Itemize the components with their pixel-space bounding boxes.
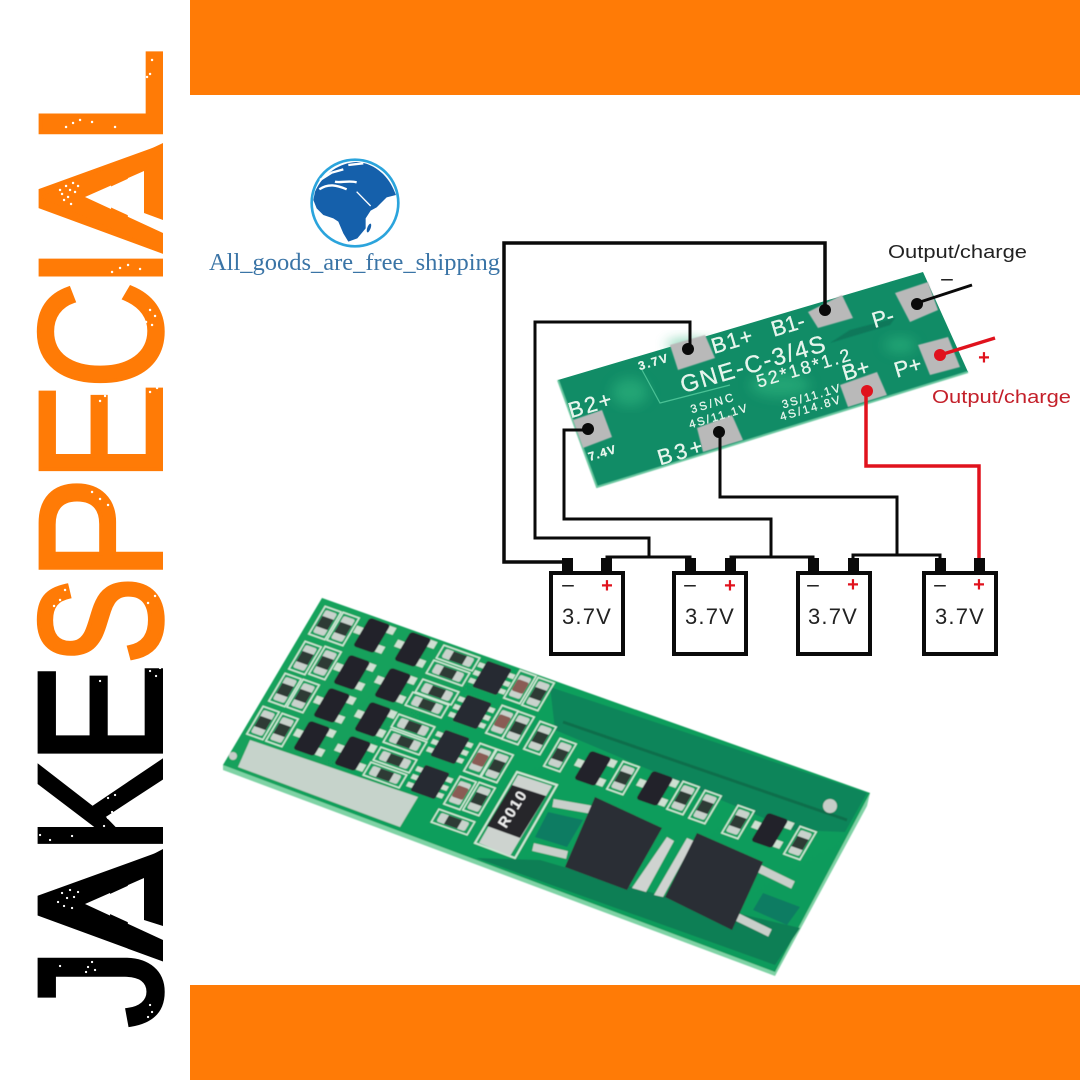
MOSFET 2 [654,833,800,933]
board silkscreen labels: 4S/11.1V [688,403,749,431]
battery 4 [924,558,996,654]
board silkscreen labels: 7.4V [586,442,617,464]
board body [558,272,968,487]
battery 1: 3.7V [562,604,612,629]
wire: B3+ to link 3-4 [720,433,897,555]
battery 4: – [934,573,946,596]
top orange band [190,0,1080,95]
board silkscreen labels: B3+ [654,433,705,470]
board silkscreen labels: P- [869,303,897,333]
mounting holes [229,752,837,813]
wire: P- output [917,285,972,303]
board silkscreen labels: 3S/NC [689,392,735,416]
battery 4: + [973,574,985,596]
PCB dark shadow line [563,722,847,820]
PCB dark copper band [550,687,867,832]
protection ICs [404,659,518,801]
right resistors [544,738,816,860]
board silkscreen labels: B2+ [565,387,615,423]
MOSFET 1 [533,797,674,892]
wordmark part: JAKE [3,664,198,1027]
wordmark part: JAKE: K [3,761,198,853]
battery 3: – [807,573,819,596]
PCB photo [223,598,870,976]
red junction dots [861,349,946,397]
board silkscreen labels: 52*18*1.2 [754,345,853,392]
board silkscreen labels: GNE-C-3/4S [677,331,829,399]
wordmark part: JAKE: E [4,664,198,764]
board silkscreen labels: B1+ [708,323,756,359]
wire: B1- to battery 1 negative [504,243,825,562]
wiring diagram board [558,272,968,487]
capacitors and resistors column [444,670,556,816]
vertical wordmark: JAKESPECIAL [3,48,199,1027]
output label: negative [888,241,1027,290]
PCB edge [223,598,870,976]
wordmark part: SPECIAL: P [4,477,199,581]
battery links [607,555,940,562]
battery 1: – [562,573,574,596]
output label: positive: + [978,347,990,369]
wordmark part: SPECIAL: A [3,146,199,252]
black wires [504,243,972,562]
PCB body [223,598,870,972]
board lighter edge [558,372,968,487]
output label: negative: Output/charge [888,241,1027,262]
battery 2: 3.7V [685,604,735,629]
wordmark part: SPECIAL: E [3,383,199,482]
wordmark part: JAKE: A [3,853,198,958]
shunt resistor R010 [475,772,557,858]
wordmark part: SPECIAL: S [3,577,198,664]
wordmark part: JAKE: J [3,948,198,1027]
logo: globe [312,160,398,246]
SOT-23 transistors [286,615,795,851]
wordmark part: SPECIAL [3,48,199,664]
board dark copper band [830,318,895,343]
wire: B1+ to link 1-2 [535,322,690,557]
left resistor block [247,606,359,747]
output label: positive [932,347,1071,407]
battery 1: + [601,575,613,597]
horizontal resistors [363,645,480,835]
board silkscreen labels: 4S/14.8V [779,394,842,424]
solder pads [573,282,960,452]
wordmark part: SPECIAL: I [3,246,198,289]
board silkscreen labels: 3S/11.1V [781,383,842,411]
board silkscreen labels [565,303,925,470]
board glow patches [612,337,916,406]
wire junction dots [582,298,923,438]
board silkscreen labels: 3.7V [636,351,669,373]
board silkscreen labels: P+ [891,351,925,383]
shunt resistor R010: R010 [495,788,531,831]
PCB lower dark strip [476,858,800,965]
nickel contact strip [238,740,418,827]
battery 3: + [847,574,859,596]
wordmark part: SPECIAL: L [4,48,199,147]
wordmark part: SPECIAL: C [4,282,199,389]
battery 3 [798,558,870,654]
board silkscreen labels: B1- [768,308,808,342]
board silkscreen labels: B+ [839,354,873,386]
red wires [866,338,995,560]
silkscreen outline [642,370,730,403]
battery 2: – [684,573,696,596]
output label: negative: – [941,267,953,290]
output label: positive: Output/charge [932,386,1071,407]
bottom orange band [190,985,1080,1080]
battery 2 [674,558,746,654]
logo caption: All_goods_are_free_shipping [209,250,500,276]
wire: B2+ to link 2-3 [564,430,771,557]
battery 1 [551,558,623,654]
battery 3: 3.7V [808,604,858,629]
battery 4: 3.7V [935,604,985,629]
battery 2: + [724,575,736,597]
